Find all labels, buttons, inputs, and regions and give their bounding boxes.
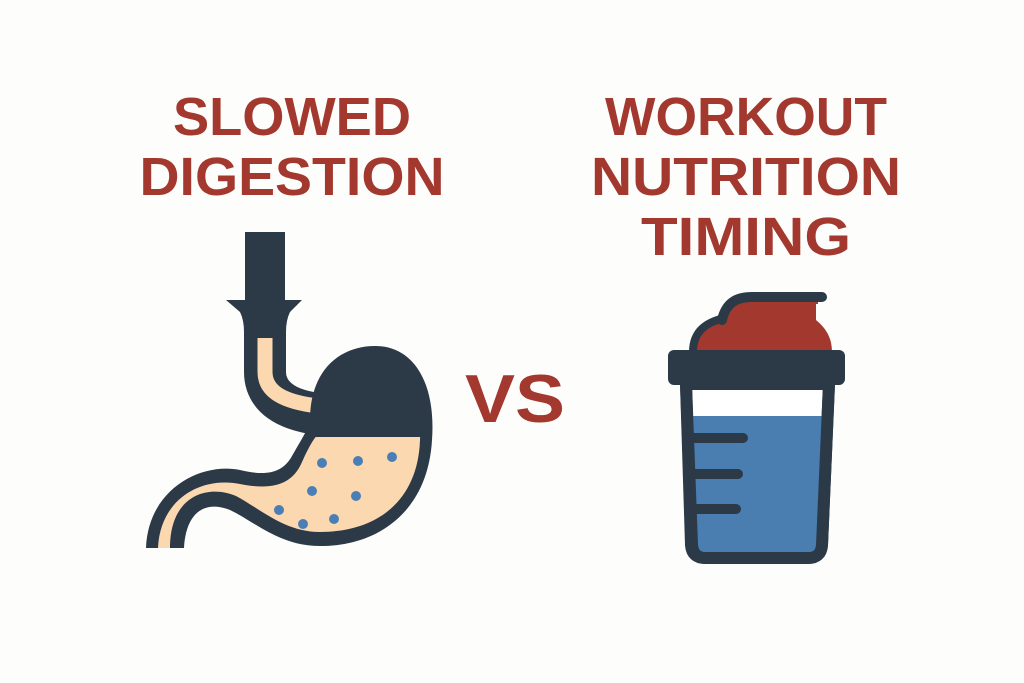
- stomach contents: [158, 437, 420, 548]
- measure marks: [693, 438, 743, 509]
- cup: [686, 384, 829, 558]
- title: workout nutrition timing: NUTRITION: [591, 147, 901, 207]
- cap: [693, 294, 832, 352]
- stomach outline: [146, 346, 432, 548]
- liquid: [693, 416, 823, 552]
- title: slowed digestion: DIGESTION: [140, 147, 444, 207]
- icon: stomach with down arrow: [140, 232, 440, 557]
- food particles: [274, 452, 397, 529]
- title: workout nutrition timing: WORKOUT: [605, 87, 887, 147]
- esophagus: [265, 320, 318, 414]
- title: workout nutrition timing: [591, 87, 901, 267]
- title: slowed digestion: SLOWED: [173, 87, 411, 147]
- arrow: [226, 232, 302, 332]
- title: workout nutrition timing: TIMING: [641, 207, 851, 267]
- icon: protein shaker: [668, 294, 845, 558]
- title: slowed digestion: [140, 87, 444, 207]
- vs label: VS: [465, 361, 565, 437]
- collar: [668, 350, 845, 385]
